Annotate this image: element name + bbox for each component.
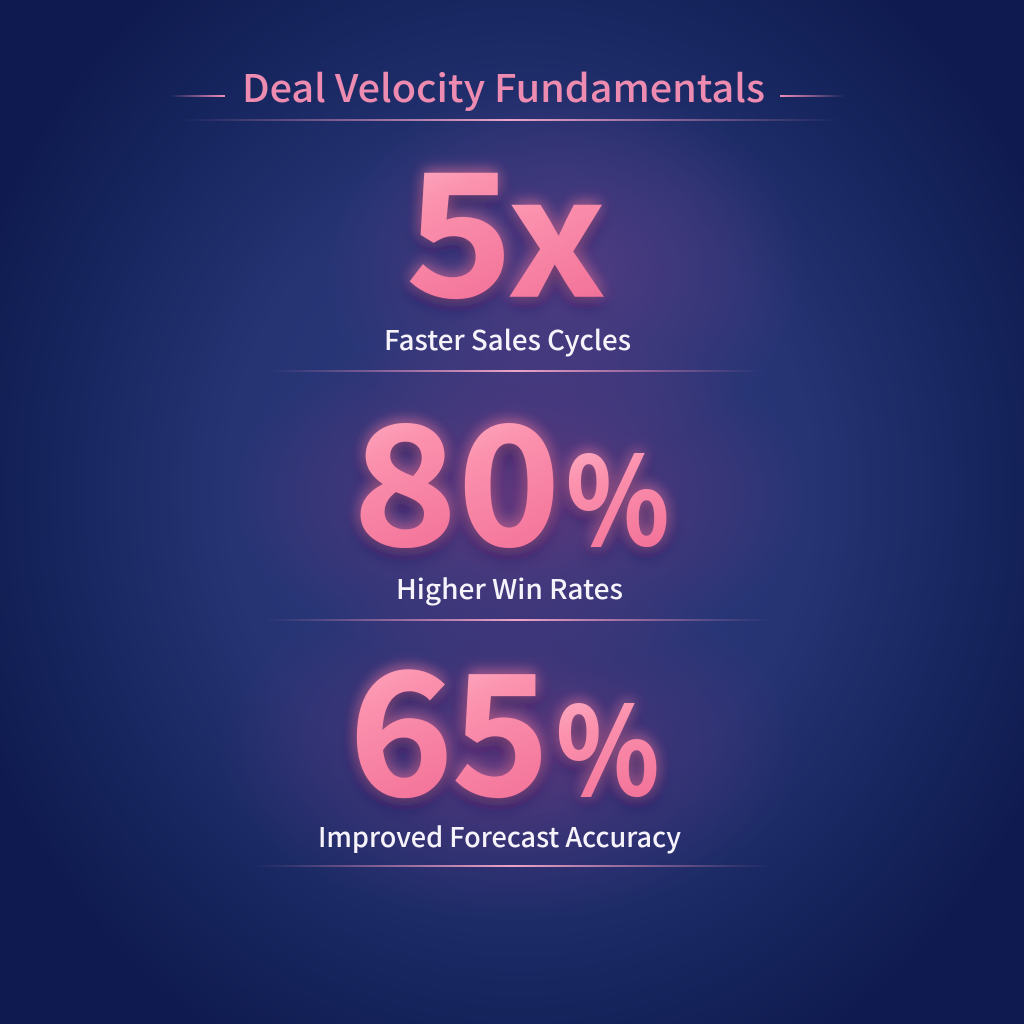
stat: 80%: 0 xyxy=(458,354,560,593)
stat: 65%: % xyxy=(556,654,659,830)
stat: 5x xyxy=(384,99,631,358)
label: Faster Sales Cycles: Faster Sales Cycles xyxy=(384,319,631,358)
stat: 65%: 5 xyxy=(452,602,549,843)
stat: 5x: 5 xyxy=(406,99,513,345)
stat: 80%: % xyxy=(566,404,669,580)
stat: 80% xyxy=(353,354,669,607)
label: Higher Win Rates: Higher Win Rates xyxy=(396,568,623,607)
stat: 65%: 6 xyxy=(349,598,453,844)
label: Improved Forecast Accuracy: Improved Forecast Accuracy xyxy=(318,816,681,855)
stat: 5x: x xyxy=(508,110,605,343)
stat: 80%: 8 xyxy=(353,355,457,593)
title: Deal Velocity Fundamentals xyxy=(242,58,765,113)
stat: 65% xyxy=(318,598,681,855)
